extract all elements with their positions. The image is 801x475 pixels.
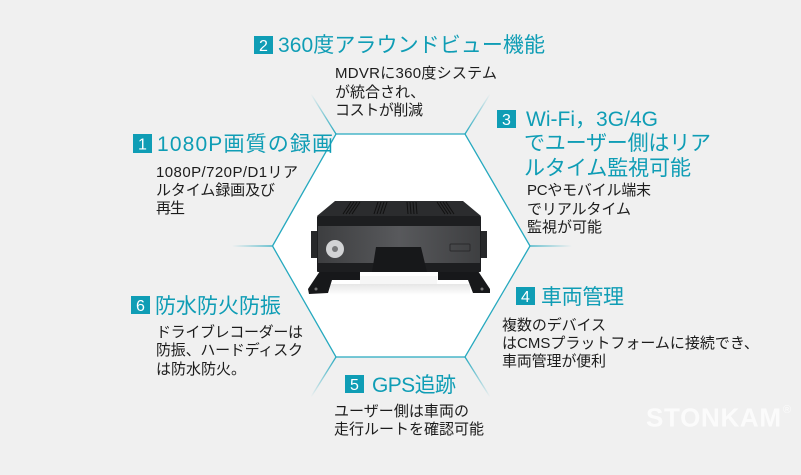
feature 1: 1080P recording	[133, 133, 333, 217]
badge 5	[345, 375, 364, 394]
heading 1: 1080P画質の録画	[157, 133, 333, 156]
badge 2: 2	[259, 38, 268, 55]
body 2: コストが削減	[335, 102, 423, 119]
hexagon panel	[272, 134, 530, 357]
heading 5: GPS追跡	[372, 374, 456, 397]
badge 4	[516, 287, 535, 306]
device: MDVR recorder	[308, 201, 490, 295]
badge 4: 4	[521, 289, 530, 306]
heading 6: 防水防火防振	[155, 295, 281, 318]
heading 3: ルタイム監視可能	[524, 157, 691, 180]
body 3: でリアルタイム	[527, 201, 631, 218]
body 1: 再生	[156, 200, 185, 217]
body 4: 車両管理が便利	[502, 352, 606, 370]
feature 6: protection	[131, 295, 303, 378]
heading 3: でユーザー側はリア	[524, 132, 711, 155]
body 5: ユーザー側は車両の	[334, 403, 469, 420]
watermark: STONKAM: STONKAM	[646, 402, 781, 432]
body 1: ルタイム録画及び	[156, 182, 275, 199]
body 6: ドライブレコーダーは	[156, 323, 303, 341]
badge 2	[254, 36, 273, 55]
badge 6	[131, 296, 150, 315]
body 6: は防水防火。	[156, 361, 246, 378]
badge 1	[133, 134, 152, 154]
badge 6: 6	[136, 298, 145, 315]
watermark: STONKAM: ®	[783, 404, 791, 416]
body 6: 防振、ハードディスク	[156, 341, 303, 359]
body 2: MDVRに360度システム	[335, 65, 497, 82]
spoke connectors	[232, 94, 572, 397]
feature 5: GPS tracking	[334, 374, 484, 438]
body 2: が統合され、	[335, 84, 425, 101]
badge 1: 1	[138, 136, 147, 154]
badge 3: 3	[502, 112, 511, 129]
feature 2: 360 view	[254, 34, 545, 119]
feature 3: remote monitoring	[497, 108, 711, 236]
body 3: PCやモバイル端末	[527, 182, 651, 199]
feature 4: fleet management	[502, 286, 759, 370]
heading 3: Wi-Fi，3G/4G	[526, 108, 658, 131]
heading 4: 車両管理	[541, 286, 624, 309]
badge 5: 5	[350, 377, 359, 394]
body 3: 監視が可能	[527, 219, 602, 236]
body 1: 1080P/720P/D1リア	[156, 164, 298, 181]
body 5: 走行ルートを確認可能	[334, 421, 484, 438]
badge 3	[497, 110, 516, 129]
body 4: 複数のデバイス	[502, 316, 606, 334]
body 4: はCMSプラットフォームに接続でき、	[502, 335, 759, 352]
heading 2: 360度アラウンドビュー機能	[278, 34, 545, 57]
